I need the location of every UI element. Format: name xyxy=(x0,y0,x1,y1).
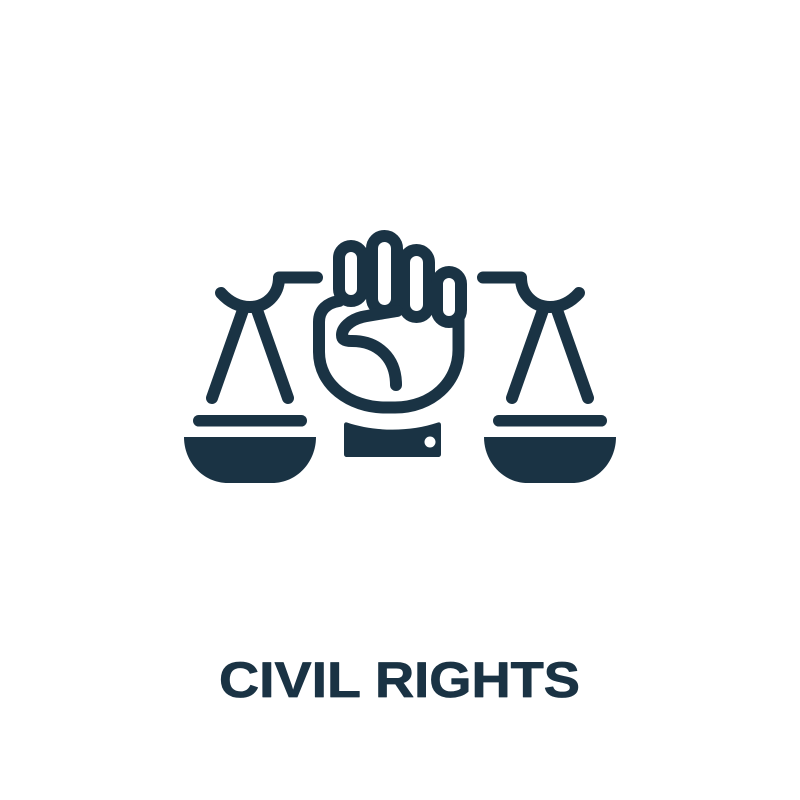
right scale strings xyxy=(512,310,588,398)
fist fingers xyxy=(339,236,461,322)
left scale strings xyxy=(212,310,288,398)
title xyxy=(219,652,580,708)
right scale bar xyxy=(493,415,607,426)
left scale bowl xyxy=(184,437,316,483)
fist palm outline xyxy=(319,301,458,408)
title: RIGHTS xyxy=(375,652,580,708)
icon: right scale xyxy=(483,278,616,483)
right scale bowl xyxy=(484,437,616,483)
right scale beam xyxy=(483,278,579,307)
fist thumb xyxy=(342,311,397,385)
icon: civil rights fist on scales xyxy=(184,236,616,483)
icon: left scale xyxy=(184,278,317,483)
left scale beam xyxy=(221,278,317,307)
icon: raised fist xyxy=(319,236,461,408)
icon: shirt cuff xyxy=(344,422,441,457)
cuff button xyxy=(424,436,436,448)
left scale bar xyxy=(193,415,307,426)
title: CIVIL xyxy=(219,652,361,708)
